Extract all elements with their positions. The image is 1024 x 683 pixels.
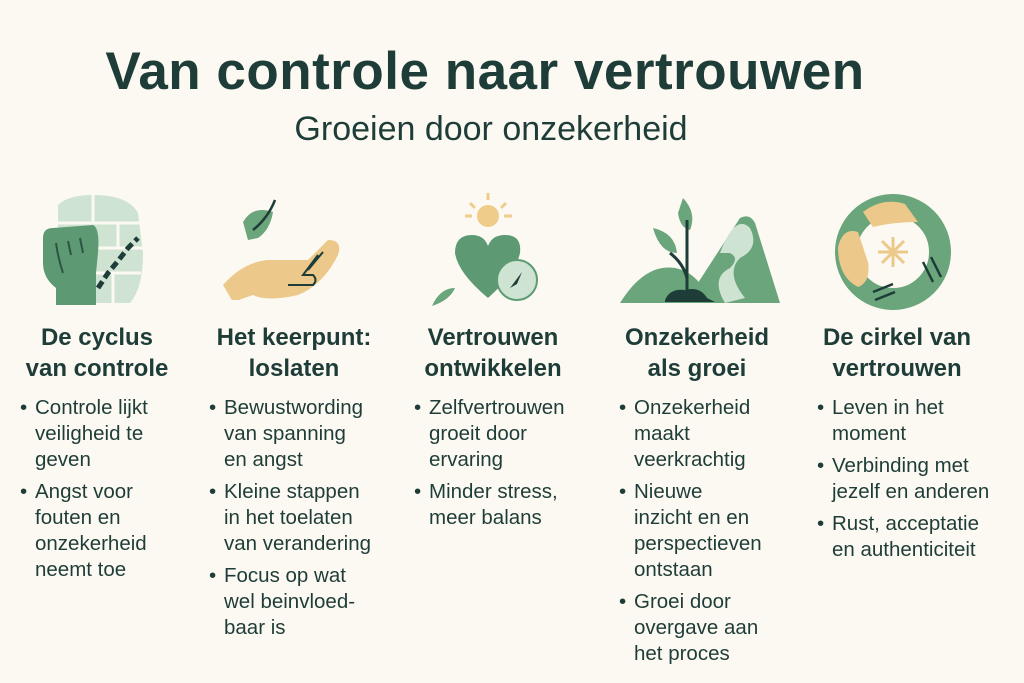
heading — [26, 324, 168, 382]
title: Van controle naar vertrouwen — [105, 42, 865, 101]
heading: ontwikkelen — [424, 355, 562, 382]
heading: loslaten — [249, 355, 339, 382]
heading: als groei — [648, 355, 746, 382]
bullets: wel beinvloed- — [224, 590, 355, 613]
heading — [217, 324, 371, 382]
bullets: van verandering — [224, 532, 371, 555]
panel: de cyclus van controle — [20, 324, 168, 581]
bullets: Leven in het moment — [832, 396, 944, 445]
bullets: Nieuwe — [634, 480, 702, 503]
bullets: Angst voor fouten en onzekerheid neemt toe — [35, 480, 147, 581]
bullets: perspectieven — [634, 532, 762, 555]
bullets: inzicht en en — [634, 506, 749, 529]
icon: open hand with leaf — [223, 200, 340, 300]
icon: fist with chain and wall — [43, 195, 143, 305]
bullets — [20, 396, 148, 581]
bullets: ontstaan — [634, 558, 713, 581]
subtitle: Groeien door onzekerheid — [294, 110, 688, 148]
bullets: Zelfvertrouwen groeit door ervaring — [429, 396, 565, 471]
bullets: Groei door — [634, 590, 731, 613]
bullets: en angst — [224, 448, 303, 471]
bullets: Onzekerheid — [634, 396, 750, 419]
heading: Vertrouwen — [428, 324, 558, 351]
bullets: Rust, acceptatie en authenticiteit — [832, 512, 979, 561]
bullets — [620, 396, 762, 665]
bullets: maakt — [634, 422, 690, 445]
bullets: overgave aan — [634, 616, 758, 639]
heading: De cyclus — [41, 324, 153, 351]
icon: sprout and mountain — [620, 198, 780, 303]
bullets: Focus op wat — [224, 564, 346, 587]
bullets: Minder stress, meer balans — [429, 480, 558, 529]
heading — [424, 324, 562, 382]
bullets: in het toelaten — [224, 506, 353, 529]
bullets — [818, 396, 989, 561]
bullets: van spanning — [224, 422, 346, 445]
icon: heart with sun and compass — [432, 193, 538, 306]
bullets: Controle lijkt veiligheid te geven — [35, 396, 148, 471]
heading: Het keerpunt: — [217, 324, 371, 351]
heading — [625, 324, 769, 382]
panel: vertrouwen ontwikkelen — [414, 324, 565, 529]
heading: van controle — [26, 355, 168, 382]
heading: Onzekerheid — [625, 324, 769, 351]
bullets: baar is — [224, 616, 286, 639]
heading: De cirkel van — [823, 324, 971, 351]
bullets: veerkrachtig — [634, 448, 746, 471]
bullets: Bewustwording — [224, 396, 363, 419]
bullets — [210, 396, 371, 639]
bullets: Verbinding met jezelf en anderen — [832, 454, 989, 503]
heading: vertrouwen — [832, 355, 962, 382]
bullets — [414, 396, 565, 529]
heading — [823, 324, 971, 382]
bullets: Kleine stappen — [224, 480, 360, 503]
panel: onzekerheid als groei — [620, 324, 769, 665]
bullets: het proces — [634, 642, 730, 665]
icon: circle of hands with sun — [835, 194, 951, 310]
panel: de cirkel van vertrouwen — [818, 324, 989, 561]
panel: het keerpunt — [210, 324, 371, 639]
